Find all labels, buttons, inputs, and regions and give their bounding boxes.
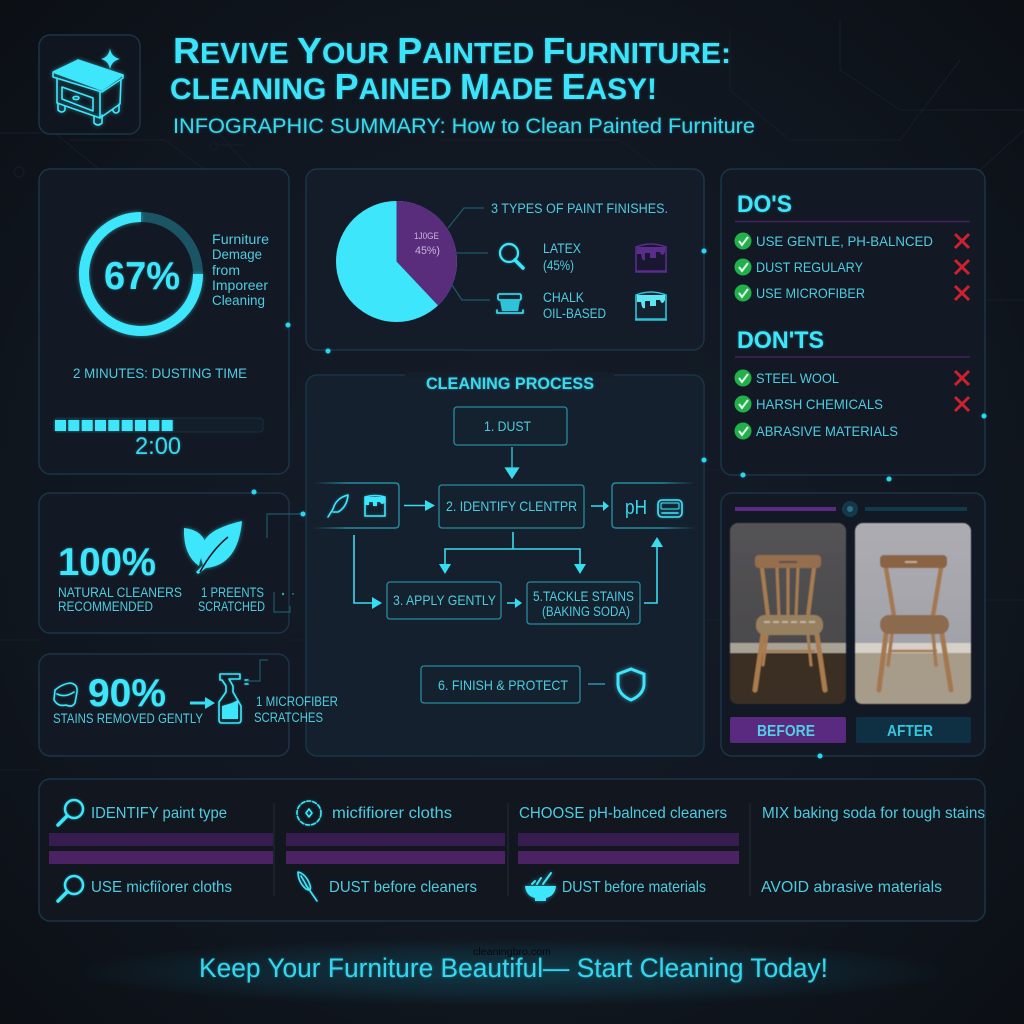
panel: tips strip [39, 779, 985, 921]
icon: chalk tray [497, 294, 523, 313]
arrow step 3 to 5 [507, 598, 522, 608]
before/after slider bar [735, 501, 967, 517]
pie chart [336, 201, 457, 322]
connector dots [252, 248, 986, 758]
progress ring 67% [84, 217, 198, 331]
step 5 tackle stains [527, 582, 640, 624]
title: REVIVE YOUR PAINTED FURNITURE: [173, 30, 731, 71]
do's list: USE MICROFIBER [756, 285, 865, 301]
tip: use microfiber cloths: USE micfiîorer cloths [91, 879, 232, 896]
tip: dust before materials: DUST before materials [562, 879, 706, 896]
icon: cyan paint can [635, 292, 667, 320]
tip: identify paint type: IDENTIFY paint type [91, 805, 227, 822]
tip: microfiber cloths [297, 801, 452, 825]
pie chart: 45%) [415, 245, 440, 257]
icon: feather [328, 495, 348, 517]
pie leader lines [448, 208, 490, 300]
icon: spray bottle [219, 674, 248, 723]
branching arrows from step 2 [439, 532, 586, 574]
purple divider bars [49, 833, 739, 864]
natural cleaners caption: RECOMMENDED [58, 599, 153, 614]
latex label [543, 241, 581, 273]
arrow step 2 to pH [591, 501, 609, 511]
step 5 tackle stains: 5.TACKLE STAINS [533, 589, 634, 604]
after label [856, 717, 971, 743]
ring caption: from [212, 262, 240, 278]
tip: microfiber cloths: micfifiorer cloths [332, 805, 452, 822]
after label: AFTER [887, 723, 933, 740]
tip: avoid abrasive materials: AVOID abrasive materials [761, 879, 942, 896]
do's list: USE GENTLE, PH-BALNCED [756, 233, 933, 249]
finishes heading: 3 TYPES OF PAINT FINISHES. [491, 201, 668, 216]
tip: use microfiber cloths [58, 876, 232, 901]
panel: paint finishes pie [306, 169, 704, 350]
pH box: pH [625, 497, 647, 519]
panel: before and after [721, 493, 985, 756]
microfiber caption: 1 MICROFIBER [256, 694, 338, 709]
timer value: 2:00 [135, 433, 181, 460]
progress ring 67%: 67% [104, 255, 180, 298]
before label [730, 717, 846, 743]
don'ts list: ABRASIVE MATERIALS [756, 423, 898, 439]
big number 100%: 100% [58, 541, 156, 584]
step 1 dust [454, 407, 567, 445]
latex label: LATEX [543, 241, 581, 256]
chalk and oil labels: CHALK [543, 290, 584, 305]
chalk and oil labels [543, 290, 606, 321]
don'ts list: HARSH CHEMICALS [756, 396, 883, 412]
before photo: worn chair [730, 523, 846, 704]
process heading: CLEANING PROCESS [426, 374, 594, 393]
do's list [734, 232, 969, 302]
icon: purple paint can [635, 244, 667, 272]
panel: 100% natural cleaners [39, 493, 289, 633]
tip: mix baking soda: MIX baking soda for tough stains [762, 805, 985, 822]
arrow step 1 to 2 [506, 447, 518, 478]
panel: 67% furniture damage stat [39, 169, 289, 474]
step 1 dust: 1. DUST [484, 419, 531, 434]
do's heading: DO'S [737, 191, 792, 218]
panel: cleaning process flowchart [306, 372, 704, 756]
step 3 apply gently: 3. APPLY GENTLY [393, 592, 497, 608]
don'ts heading: DON'TS [737, 327, 824, 354]
subtitle: INFOGRAPHIC SUMMARY: How to Clean Painted Furniture [173, 115, 755, 138]
step 3 apply gently [387, 582, 501, 619]
latex label: (45%) [543, 258, 574, 273]
dusting time label: 2 MINUTES: DUSTING TIME [73, 365, 247, 381]
icon: leaves [184, 521, 242, 574]
arrow tools to step 3 [354, 535, 382, 609]
step 2 identify cleaner [439, 485, 584, 528]
ring caption: Furniture [212, 231, 269, 247]
don'ts list: STEEL WOOL [756, 370, 839, 386]
stains caption: STAINS REMOVED GENTLY [53, 711, 203, 726]
arrow step 5 to pH [644, 537, 663, 603]
icon: shield [618, 669, 644, 700]
pH box [612, 483, 695, 528]
prevents scratches caption: 1 PREENTS [201, 585, 264, 600]
icon: small paint can [365, 496, 385, 516]
icon: magnifier [500, 244, 523, 268]
prevents scratches caption: SCRATCHED [198, 599, 265, 614]
arrow tools to step 2 [404, 500, 435, 511]
don'ts list [734, 370, 969, 440]
tip: choose pH-balanced cleaners: CHOOSE pH-balnced cleaners [519, 805, 727, 822]
tools box with feather and can [313, 483, 399, 528]
step 6 finish and protect: 6. FINISH & PROTECT [438, 677, 568, 693]
icon: sponge [54, 683, 77, 706]
ring caption: Imporeer [212, 277, 268, 293]
natural cleaners caption [58, 585, 182, 614]
circuit connectors around left stats [247, 514, 303, 681]
natural cleaners caption: NATURAL CLEANERS [58, 585, 182, 600]
tip: dust before materials [525, 873, 706, 901]
footer glow [72, 938, 952, 1006]
header icon: nightstand with sparkle [39, 35, 140, 134]
chalk and oil labels: OIL-BASED [543, 306, 606, 321]
do's list: DUST REGULARY [756, 259, 864, 275]
panel: do's and don'ts [721, 169, 985, 475]
ring caption [212, 231, 269, 308]
tip: identify paint type [58, 800, 227, 825]
step 2 identify cleaner: 2. IDENTIFY CLENTPR [446, 498, 577, 514]
prevents scratches caption [198, 585, 265, 614]
icon: pH meter [658, 500, 682, 517]
after photo: restored chair [855, 523, 971, 704]
step 5 tackle stains: (BAKING SODA) [542, 604, 630, 619]
source credit: cleaningbro.com [473, 947, 551, 958]
tip: dust before cleaners [298, 872, 477, 901]
pie chart: 1J0GE [414, 231, 439, 242]
microfiber caption [254, 694, 338, 725]
tip: dust before cleaners: DUST before cleaners [329, 879, 477, 896]
arrow to spray bottle [190, 697, 215, 709]
step 6 finish and protect [421, 666, 580, 703]
ring caption: Demage [212, 246, 262, 262]
title: CLEANING PAINED MADE EASY! [170, 66, 657, 107]
panel: 90% stains removed [39, 654, 338, 756]
ring caption: Cleaning [212, 292, 265, 308]
call to action footer: Keep Your Furniture Beautiful— Start Cleaning Today! [199, 953, 828, 983]
before label: BEFORE [757, 723, 815, 740]
title [170, 30, 731, 107]
microfiber caption: SCRATCHES [254, 710, 323, 725]
big number 90%: 90% [88, 672, 166, 715]
dusting time progress bar [54, 418, 263, 432]
